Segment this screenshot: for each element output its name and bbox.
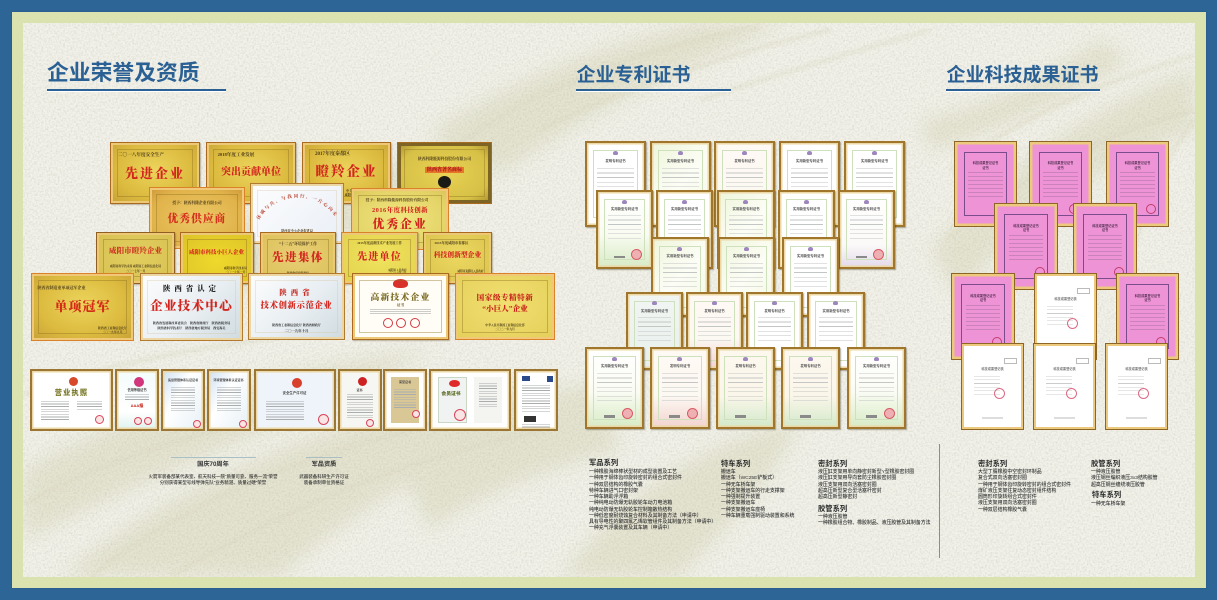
patent list: 密封系列: 液压支架用双向活塞密封圈	[818, 482, 877, 488]
patent certificate row 5	[585, 347, 908, 430]
certificate: 环境管理体系认证证书: 环境管理体系认证证书	[213, 378, 244, 382]
achievement record 10	[1033, 343, 1096, 430]
patent list: 特车系列: 一种强制提升装置	[721, 495, 760, 500]
achievement record 11	[1105, 343, 1168, 430]
plaque: 瞪羚企业: 中共咸阳市秦都区委	[346, 189, 375, 193]
certificate: 安全生产许可证	[254, 369, 336, 431]
caption: 国庆70周年: 分别获得某型号线导弹先队“业务精湛、质量过硬”荣誉	[160, 480, 266, 485]
plaque: 国家级专精特新小巨人企业: 二〇二一年九月	[495, 328, 515, 331]
plaque: 国家级专精特新小巨人企业: “小巨人”企业	[482, 304, 528, 313]
certificate: 营业执照	[30, 369, 113, 431]
patent list: 特车系列: 特车系列	[721, 459, 750, 468]
certificate: 安全生产许可证: 安全生产许可证	[283, 391, 306, 395]
plaque: 陕西省认定企业技术中心: 企业技术中心	[150, 299, 233, 313]
plaque: 咸阳市瞪羚企业: 咸阳市瞪羚企业	[109, 246, 162, 255]
achievement list: 特车系列: 一种无车桥车架	[1091, 502, 1125, 507]
achievement certificate 6: 证书	[980, 298, 986, 302]
patent list: 特车系列	[721, 459, 794, 519]
plaque: 先进单位: 2015年度高新技术产业发展工作	[357, 241, 402, 245]
plaque: 国家级专精特新小巨人企业	[455, 273, 555, 340]
caption: 国庆70周年: 火箭军装备部某代表室、航天科技一院“质量可靠、服务一流”荣誉	[148, 474, 278, 479]
achievement list: 密封系列: 液压支架用双向活塞密封圈	[978, 501, 1037, 506]
achievement list: 特车系列	[1091, 490, 1125, 507]
panel: licence and qualification certificates row	[30, 369, 558, 431]
patent 1-5	[844, 141, 905, 227]
achievement certificate 3: 证书	[1134, 166, 1141, 170]
plaque: 高新技术企业证书: 证书	[397, 303, 404, 307]
panel: achievement certificates wall	[951, 141, 1179, 430]
achievement record 7	[1034, 273, 1097, 360]
plaque: 高新技术企业证书: 高新技术企业	[370, 292, 430, 302]
patent list: 军品系列: 一种低密度耐烧蚀复合材料及其制备方法（申请中）	[589, 514, 702, 519]
plaque: 同行致辞 (white arc)	[250, 183, 344, 244]
patent list: 特车系列: 搬运车	[721, 470, 736, 475]
plaque: 技术创新示范企业: 技术创新示范企业	[261, 301, 332, 310]
patent 1-1: 发明专利证书	[605, 159, 626, 163]
certificate: 荣誉证书（红星）: 证书	[356, 388, 362, 392]
patent list: 胶管系列	[818, 504, 930, 526]
patent 5-4	[781, 347, 840, 429]
plaque: 咸阳市瞪羚企业	[96, 232, 175, 284]
patent list: 军品系列: 具有导电性的聚四氟乙烯软管组件及其制备方法（申请中）	[589, 520, 716, 525]
achievement list: 密封系列	[978, 459, 1071, 512]
achievement certificate 5	[1073, 203, 1137, 290]
achievement list: 密封系列: 密封系列	[978, 459, 1007, 468]
heading underline: patents	[576, 88, 731, 90]
patent certificate row 1	[585, 141, 906, 228]
achievement certificate 4	[994, 203, 1058, 290]
patent 3-2	[718, 237, 775, 317]
patent list: 军品系列: 一种双层结构的橡胶气囊	[589, 482, 643, 488]
achievement certificate 5: 科技成果登记证书	[1092, 224, 1118, 228]
patent list: 胶管系列: 一种液压胶管	[818, 514, 847, 520]
patent list: 军品系列: 一种充气浮囊装置及其车辆（申请中）	[589, 526, 672, 531]
certificate: 信用等级证书 AAA	[115, 369, 159, 431]
patent 4-3: 发明专利证书	[764, 309, 785, 313]
patent 4-1: 实用新型专利证书	[641, 309, 668, 313]
patent 5-2: 发明专利证书	[670, 364, 690, 368]
certificate: 环境管理体系认证证书	[206, 369, 250, 431]
patent list: 密封系列: 液压缸支架用导向套防尘橡胶密封圈	[818, 476, 896, 481]
plaque: 优秀供应商: 优秀供应商	[168, 213, 226, 225]
achievement list: 密封系列: 复合式双向活塞密封圈	[978, 476, 1027, 481]
achievement list: 密封系列: 一种用于钢体齿印旋转密封的组合式密封件	[978, 482, 1071, 488]
plaque: 2016年度科技创新优秀企业	[351, 188, 449, 250]
achievement certificate 6	[951, 273, 1015, 360]
panel: honour plaques wall	[31, 142, 555, 342]
achievement certificate 1	[954, 141, 1017, 227]
achievement record 9: 科技成果登记表	[981, 367, 1004, 371]
achievement certificate 1: 证书	[982, 166, 989, 170]
plaque: 瞪羚企业: 咸阳市秦都区人民政府	[345, 193, 376, 197]
patent 3-1: 实用新型专利证书	[666, 254, 694, 258]
divider: achievements column rule	[938, 444, 940, 558]
patent list: 密封系列: 超高压新型复合型活塞杆密封	[818, 489, 882, 494]
plaque: 陕西省著名商标: 陕西省著名商标	[427, 168, 462, 172]
patent list: 胶管系列: 胶管系列	[818, 504, 847, 513]
plaque: 2016年度科技创新优秀企业: 优秀企业	[372, 217, 428, 231]
achievement list: 胶管系列	[1091, 459, 1158, 488]
achievement certificate 8	[1116, 273, 1179, 360]
achievement record 7: 科技成果登记表	[1054, 297, 1077, 301]
plaque: 先进集体	[260, 232, 336, 284]
plaque: 技术创新示范企业: 陕西省	[279, 288, 314, 297]
achievement certificate 4: 科技成果登记证书	[1013, 224, 1039, 228]
caption: 国庆70周年	[148, 457, 278, 485]
plaque: 单项冠军	[31, 273, 134, 341]
patent 1-4	[779, 141, 840, 227]
patent list: 军品系列: 一种车辆助浮浮箱	[589, 495, 628, 500]
plaque: 国家级专精特新小巨人企业: 国家级专精特新	[477, 293, 533, 302]
caption: 军品资质	[299, 457, 349, 485]
plaque: 先进单位: 咸阳市人民政府	[388, 269, 407, 272]
certificate: 营业执照: 营业执照	[55, 388, 88, 397]
patent 5-3	[716, 347, 775, 429]
achievement record 9	[961, 343, 1024, 430]
caption: 军品资质: 武器装备科研生产许可证	[299, 474, 349, 479]
plaque: 科技创新型企业: 科技创新型企业	[434, 252, 481, 259]
patent certificate row 4	[626, 292, 866, 372]
patent 5-1: 实用新型专利证书	[601, 364, 628, 368]
achievement certificate 1: 科技成果登记证书	[973, 161, 998, 165]
patent 4-2	[686, 292, 743, 370]
patent 1-2: 实用新型专利证书	[667, 159, 694, 163]
patent 2-5	[838, 190, 895, 269]
plaque: 瞪羚企业	[302, 142, 391, 204]
patent 2-2: 实用新型专利证书	[671, 207, 698, 211]
patent 2-1: 实用新型专利证书	[611, 207, 638, 211]
plaque: 先进集体: “十二五”环境保护工作	[279, 242, 317, 246]
plaque: 先进企业	[110, 142, 200, 204]
achievement certificate 2: 科技成果登记证书	[1048, 161, 1073, 165]
patent list: 军品系列: 军品系列	[589, 458, 618, 467]
plaque: 国家级专精特新小巨人企业: 中华人民共和国工业和信息化部	[485, 324, 525, 327]
plaque: 咸阳市科技小巨人企业: 咸阳市科学技术局	[224, 266, 247, 270]
plaque: 2016年度科技创新优秀企业: 授予：陕西科隆能源科技股份有限公司	[366, 198, 428, 202]
patent list: 密封系列: 液压缸支架用单向静密封新型Y型橡胶密封圈	[818, 470, 914, 475]
achievement certificate 8: 证书	[1144, 298, 1151, 302]
patent 5-3: 发明专利证书	[735, 364, 756, 368]
plaque: 咸阳市科技小巨人企业: 二〇一七年一月	[225, 270, 246, 274]
plaque: 陕西省认定企业技术中心: 陕西省认定	[163, 284, 220, 293]
certificate: 质量管理体系认证证书: 质量管理体系认证证书	[168, 378, 198, 382]
plaque: 同行致辞 (white arc): 休戚与共、与我同行、一片心向未	[256, 194, 337, 220]
achievement certificate 4: 证书	[1023, 228, 1029, 232]
plaque: 陕西省认定企业技术中心	[140, 273, 243, 341]
heading underline: achievements	[946, 88, 1100, 90]
plaque: 陕西省著名商标: 陕西科隆能源科技股份有限公司	[418, 157, 471, 161]
patent certificate row 2	[596, 190, 896, 270]
patent list: 胶管系列: 一种橡胶组合物、橡胶制品、液压胶管及其制备方法	[818, 521, 930, 526]
plaque: 单项冠军: 陕西省工业和信息化厅	[98, 326, 127, 330]
achievement list: 密封系列: 一种双层结构橡胶气囊	[978, 508, 1027, 512]
plaque: 咸阳市科技小巨人企业	[180, 232, 254, 284]
heading: 企业荣誉及资质: 企业荣誉及资质	[47, 60, 200, 85]
achievement list: 胶管系列: 液压钢丝编织液压3x3结构胶管	[1091, 476, 1158, 481]
heading underline: honours	[47, 88, 226, 90]
certificate: 会员证书: 会员证书	[441, 392, 461, 397]
patent 5-5: 实用新型专利证书	[863, 364, 890, 368]
patent 2-2	[656, 190, 713, 269]
patent 2-5: 实用新型专利证书	[853, 207, 880, 211]
certificate: 会员证书（金色）	[383, 369, 427, 431]
plaque: 咸阳市瞪羚企业: 二〇一七年一月	[126, 270, 145, 273]
plaque: 先进企业: 二〇一八年度安全生产	[118, 152, 164, 157]
plaque: 高新技术企业证书	[352, 273, 449, 340]
plaque: 咸阳市瞪羚企业: 咸阳市科学技术局 咸阳市工业和信息化局	[110, 265, 161, 268]
achievement record 11: 科技成果登记表	[1125, 367, 1148, 371]
patent list: 密封系列	[818, 459, 914, 500]
patent 3-1	[651, 237, 709, 317]
certificate: 质量管理体系认证证书	[161, 369, 205, 431]
plaque: 技术创新示范企业	[248, 273, 345, 340]
patent 3-2: 实用新型专利证书	[733, 254, 760, 258]
patent list: 军品系列: 一种橡胶海绵棒状型材的成型装置及工艺	[589, 470, 677, 475]
achievement certificate 5: 证书	[1102, 228, 1108, 232]
patent 3-3: 实用新型专利证书	[797, 254, 824, 258]
achievement list: 密封系列: 圆筒形印旋转组合式密封件	[978, 495, 1037, 500]
certificate: 荣誉证书（红星）	[338, 369, 382, 431]
plaque: 科技创新型企业: 2013年度咸阳市秦都区	[435, 241, 468, 245]
plaque: 优秀供应商	[149, 187, 245, 249]
achievement certificate 3	[1106, 141, 1169, 227]
plaque: 单项冠军: 单项冠军	[54, 299, 110, 314]
plaque: 先进集体: 陕西省环境保护厅	[287, 272, 309, 275]
patent list: 军品系列: 一种用于钢体齿印旋转密封的组合式密封件	[589, 476, 682, 481]
achievement list: 密封系列: 大型丁腈橡胶中空密封环制品	[978, 470, 1042, 475]
patent 4-4: 实用新型专利证书	[822, 309, 850, 313]
plaque: 陕西省认定企业技术中心: 陕西省科学技术厅 陕西省地方税务局 西安海关	[157, 326, 226, 330]
certificate: 会员证书（金色）: 荣誉证书	[399, 380, 411, 384]
patent 5-2	[650, 347, 710, 429]
plaque: 单项冠军: 陕西省制造业单项冠军企业	[38, 285, 86, 290]
patent list: 密封系列: 密封系列	[818, 459, 847, 468]
caption: 军品资质: 装备承制单位资格证	[304, 480, 344, 485]
patent list: 特车系列: 一种无车桥车架	[721, 482, 755, 488]
achievement list: 特车系列: 特车系列	[1092, 490, 1121, 499]
patent 2-1	[596, 190, 653, 269]
plaque: 突出贡献单位: 2018年度工业发展	[218, 152, 254, 157]
patent 2-4	[778, 190, 835, 269]
patent list: 特车系列: 一种支架搬运车的行走支撑架	[721, 489, 785, 494]
certificate: 体系认证证书（英文）	[514, 369, 558, 431]
patent list: 军品系列	[589, 458, 716, 531]
achievement list: 胶管系列: 一种液压胶管	[1091, 470, 1120, 475]
patent 3-3	[782, 237, 839, 317]
panel: patent certificates wall	[585, 141, 908, 430]
achievement list: 密封系列: 煤矿液压支架往复动态密封组件结构	[978, 489, 1056, 494]
heading: 企业专利证书: 企业专利证书	[576, 64, 691, 86]
patent 1-3	[714, 141, 775, 227]
plaque: 先进集体: 先进集体	[272, 252, 324, 264]
patent 1-4: 实用新型专利证书	[796, 159, 823, 163]
plaque: 科技创新型企业	[423, 232, 492, 284]
achievement certificate 2	[1029, 141, 1092, 227]
patent 1-1	[585, 141, 646, 227]
patent list: 军品系列: 一种纯电动防爆无轨胶轮车动力电池箱	[589, 501, 672, 506]
patent certificate row 3	[651, 237, 840, 318]
plaque: 先进企业: 先进企业	[125, 166, 185, 181]
achievement certificate 3: 科技成果登记证书	[1125, 161, 1150, 165]
achievement record 10: 科技成果登记表	[1053, 367, 1076, 371]
plaque: 咸阳市科技小巨人企业: 咸阳市科技小巨人企业	[189, 250, 244, 256]
caption: 军品资质: 军品资质	[312, 460, 336, 468]
patent 5-5	[847, 347, 906, 429]
achievement list: 胶管系列: 超高压钢丝缠绕液压胶管	[1091, 482, 1145, 488]
plaque: 单项冠军: 二〇一九年九月	[102, 330, 123, 334]
plaque: 科技创新型企业: 二〇一三年	[464, 273, 477, 276]
patent list: 密封系列: 超高压新型静密封	[818, 495, 857, 500]
patent 2-3	[717, 190, 775, 269]
caption: 国庆70周年: 国庆70周年	[197, 460, 229, 468]
plaque: 瞪羚企业: 瞪羚企业	[316, 164, 378, 179]
plaque: 技术创新示范企业: 陕西省工业和信息化厅 陕西省财政厅	[272, 323, 321, 327]
certificate: 信用等级证书 AAA: AAA级	[131, 403, 143, 408]
patent list: 特车系列: 一种车辆重载强制驱动装置和系统	[721, 514, 794, 519]
achievement list: 胶管系列: 胶管系列	[1091, 459, 1120, 468]
patent 5-1	[585, 347, 644, 429]
patent 2-3: 实用新型专利证书	[732, 207, 760, 211]
plaque: 陕西省认定企业技术中心: 陕西省发展和改革委员会 陕西省财政厅 陕西省税务局	[153, 321, 230, 325]
patent list: 军品系列: 纯电动防爆无轨胶轮车控制箱散热结构	[589, 508, 672, 512]
plaque: 技术创新示范企业: 二〇一九年十月	[285, 329, 308, 333]
plaque: 先进单位	[341, 232, 418, 284]
certificate: 会员证书	[428, 369, 510, 431]
patent list: 特车系列: 一种支架搬运车座椅	[721, 508, 765, 512]
patent list: 特车系列: 搬运车（WC25E铲板式）	[721, 476, 777, 481]
certificate: 信用等级证书 AAA: 信用等级证书	[127, 388, 147, 392]
plaque: 先进单位: 二〇一六年一月	[388, 272, 407, 275]
heading: 企业科技成果证书: 企业科技成果证书	[946, 64, 1099, 86]
patent 4-3	[746, 292, 803, 370]
patent 5-4: 发明专利证书	[800, 364, 821, 368]
patent 1-2	[650, 141, 711, 227]
plaque: 瞪羚企业: 2017年度秦都区	[315, 152, 350, 157]
patent 2-4: 实用新型专利证书	[793, 207, 820, 211]
patent 1-3: 发明专利证书	[734, 159, 755, 163]
plaque: 2016年度科技创新优秀企业: 2016年度科技创新	[372, 207, 428, 214]
patent 4-4	[807, 292, 865, 370]
patent 4-2: 发明专利证书	[704, 309, 725, 313]
patent list: 军品系列: 特种车辆进气口密封架	[589, 489, 638, 494]
plaque: 突出贡献单位	[206, 142, 296, 204]
plaque: 优秀供应商: 授予：陕西科隆企业有限公司	[172, 201, 222, 205]
plaque: 同行致辞 (white arc): 陕西省中小企业促进局	[281, 229, 313, 233]
achievement certificate 6: 科技成果登记证书	[970, 294, 996, 298]
achievement certificate 2: 证书	[1057, 166, 1064, 170]
patent list: 特车系列: 一种支架搬运车	[721, 501, 755, 506]
patent 4-1	[626, 292, 683, 370]
patent 1-5: 实用新型专利证书	[861, 159, 888, 163]
plaque: 陕西省著名商标	[397, 142, 492, 204]
achievement certificate 8: 科技成果登记证书	[1135, 294, 1160, 298]
plaque: 突出贡献单位: 突出贡献单位	[221, 167, 281, 178]
plaque: 先进单位: 先进单位	[357, 252, 402, 263]
plaque: 科技创新型企业: 咸阳市秦都区人民政府	[458, 270, 483, 273]
